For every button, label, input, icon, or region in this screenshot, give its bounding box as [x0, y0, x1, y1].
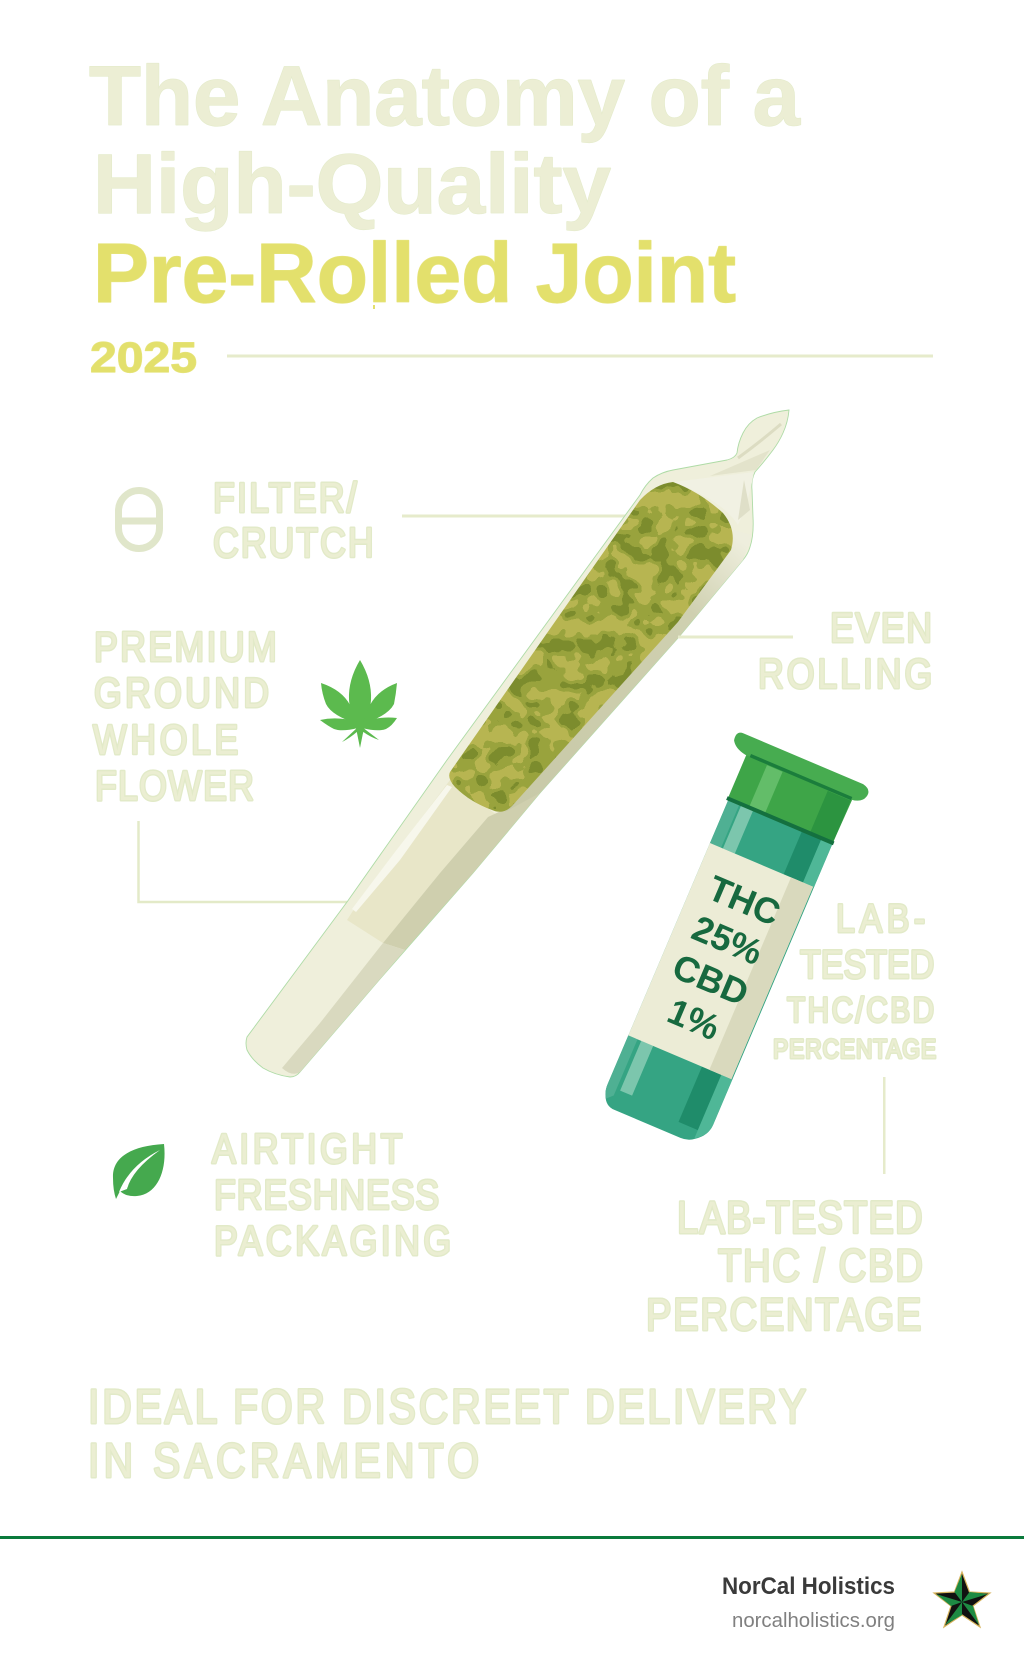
vial cap [728, 754, 852, 843]
label: even rolling: ROLLING [758, 651, 932, 698]
label: airtight freshness packaging: FRESHNESS [214, 1172, 439, 1219]
title: High-Quality [93, 137, 611, 231]
filter body tone [347, 780, 497, 943]
highlight [352, 785, 452, 912]
shadow beside flower [505, 530, 752, 812]
title [89, 49, 801, 320]
label: premium ground whole flower: GROUND [94, 670, 269, 717]
label: even rolling [758, 605, 932, 698]
footer brand: NorCal Holistics [722, 1573, 895, 1600]
vial label [628, 843, 813, 1079]
label: lab-tested large: LAB-TESTED [677, 1192, 923, 1243]
title: The Anatomy of a [89, 49, 801, 143]
tagline: IN SACRAMENTO [88, 1435, 479, 1488]
lab vial [582, 731, 871, 1153]
footer divider [0, 1536, 1024, 1539]
label: lab-tested large [646, 1192, 923, 1340]
label: premium ground whole flower: FLOWER [95, 763, 254, 810]
footer brand [722, 1573, 895, 1632]
ground flower [449, 482, 733, 812]
filter shadow upper [383, 793, 540, 950]
label: premium ground whole flower: WHOLE [93, 717, 238, 764]
label: premium ground whole flower: PREMIUM [94, 624, 277, 671]
tagline [88, 1381, 806, 1488]
label: airtight freshness packaging: PACKAGING [214, 1218, 451, 1265]
label: filter / crutch [213, 475, 374, 567]
icon: cannabis leaf [320, 660, 397, 748]
label: lab-tested small [773, 895, 936, 1064]
label: lab-tested small: PERCENTAGE [773, 1034, 936, 1064]
icon: fresh leaf [113, 1144, 165, 1199]
label: premium ground whole flower [93, 624, 277, 810]
icon: filter [116, 490, 162, 548]
pre-rolled joint [246, 410, 789, 1077]
connector: even rolling [678, 636, 793, 638]
label: airtight freshness packaging: AIRTIGHT [212, 1126, 402, 1173]
label: lab-tested small: TESTED [800, 941, 934, 987]
vial label text: 1% [662, 990, 726, 1048]
label: lab-tested large: THC / CBD [718, 1240, 923, 1291]
vial label text: 25% [686, 907, 769, 973]
vial label text: CBD [667, 946, 755, 1014]
joint paper [246, 410, 789, 1077]
twist folds [673, 472, 754, 525]
label: lab-tested small: THC/CBD [787, 991, 934, 1030]
year: 2025 [90, 334, 197, 382]
label: lab-tested large: PERCENTAGE [646, 1289, 921, 1340]
label: even rolling: EVEN [830, 605, 932, 652]
label: filter / crutch: CRUTCH [213, 520, 374, 567]
label: filter / crutch: FILTER/ [213, 475, 357, 522]
vial label text: THC [702, 867, 786, 934]
connector: premium flower [138, 821, 347, 902]
label: airtight freshness packaging [212, 1126, 451, 1265]
title: Pre-Rolled Joint [93, 226, 736, 320]
footer brand: norcalholistics.org [732, 1609, 895, 1632]
filter shadow lower [282, 943, 405, 1074]
label: lab-tested small: LAB- [836, 895, 925, 941]
tagline: IDEAL FOR DISCREET DELIVERY [88, 1381, 806, 1434]
vial label text [650, 866, 788, 1053]
vial body [599, 799, 833, 1148]
logo: nautical star [934, 1572, 990, 1627]
